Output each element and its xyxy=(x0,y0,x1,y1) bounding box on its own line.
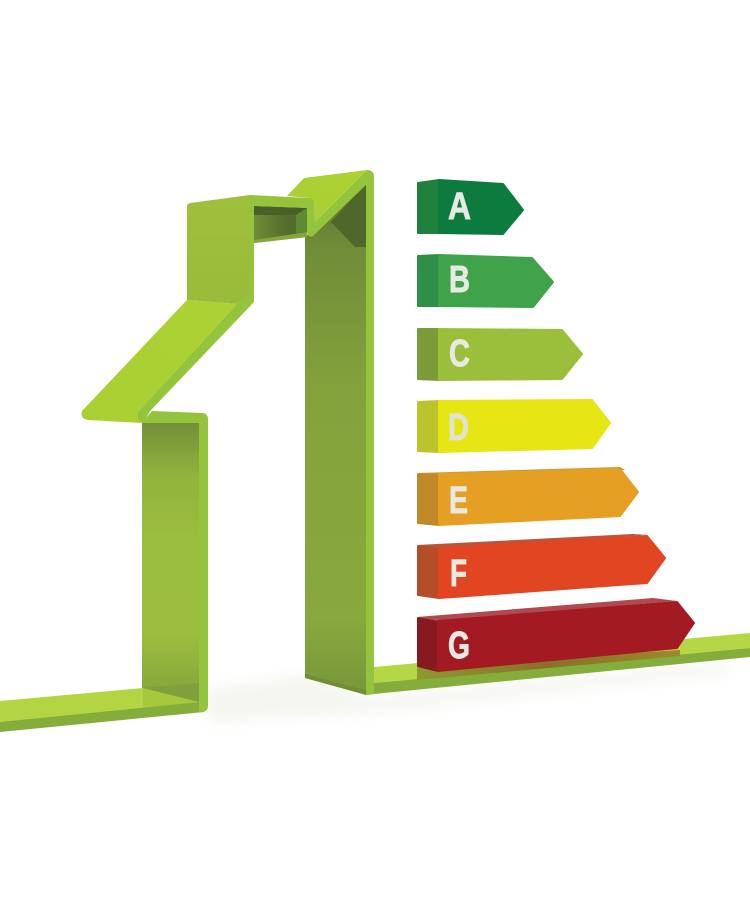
gable opening xyxy=(254,206,307,243)
left wall xyxy=(142,411,208,712)
letter G: G xyxy=(448,625,470,667)
letter A: A xyxy=(448,186,471,228)
reflection under bar G xyxy=(417,650,680,680)
right ground band xyxy=(374,633,750,694)
house outline xyxy=(0,170,750,732)
left ground band xyxy=(0,683,204,732)
bar B xyxy=(418,255,553,307)
bar C xyxy=(418,329,582,380)
gable front edge xyxy=(245,170,367,304)
roof front edge xyxy=(138,292,254,423)
lower roof slab xyxy=(82,300,237,423)
right wall xyxy=(305,183,368,695)
right wall front edge xyxy=(366,170,374,695)
letter D: D xyxy=(448,407,469,449)
upper roof slab xyxy=(287,170,367,222)
letter E: E xyxy=(449,480,468,522)
bar A xyxy=(418,180,523,234)
ground shadow xyxy=(205,662,735,722)
bar E xyxy=(417,467,638,525)
letter B: B xyxy=(449,259,470,301)
bar F xyxy=(417,534,665,598)
bar G xyxy=(417,598,694,671)
letter F: F xyxy=(450,553,467,595)
chimney panel xyxy=(187,195,250,304)
energy rating bars xyxy=(417,180,694,680)
bar D xyxy=(418,400,610,452)
letter C: C xyxy=(449,333,470,375)
